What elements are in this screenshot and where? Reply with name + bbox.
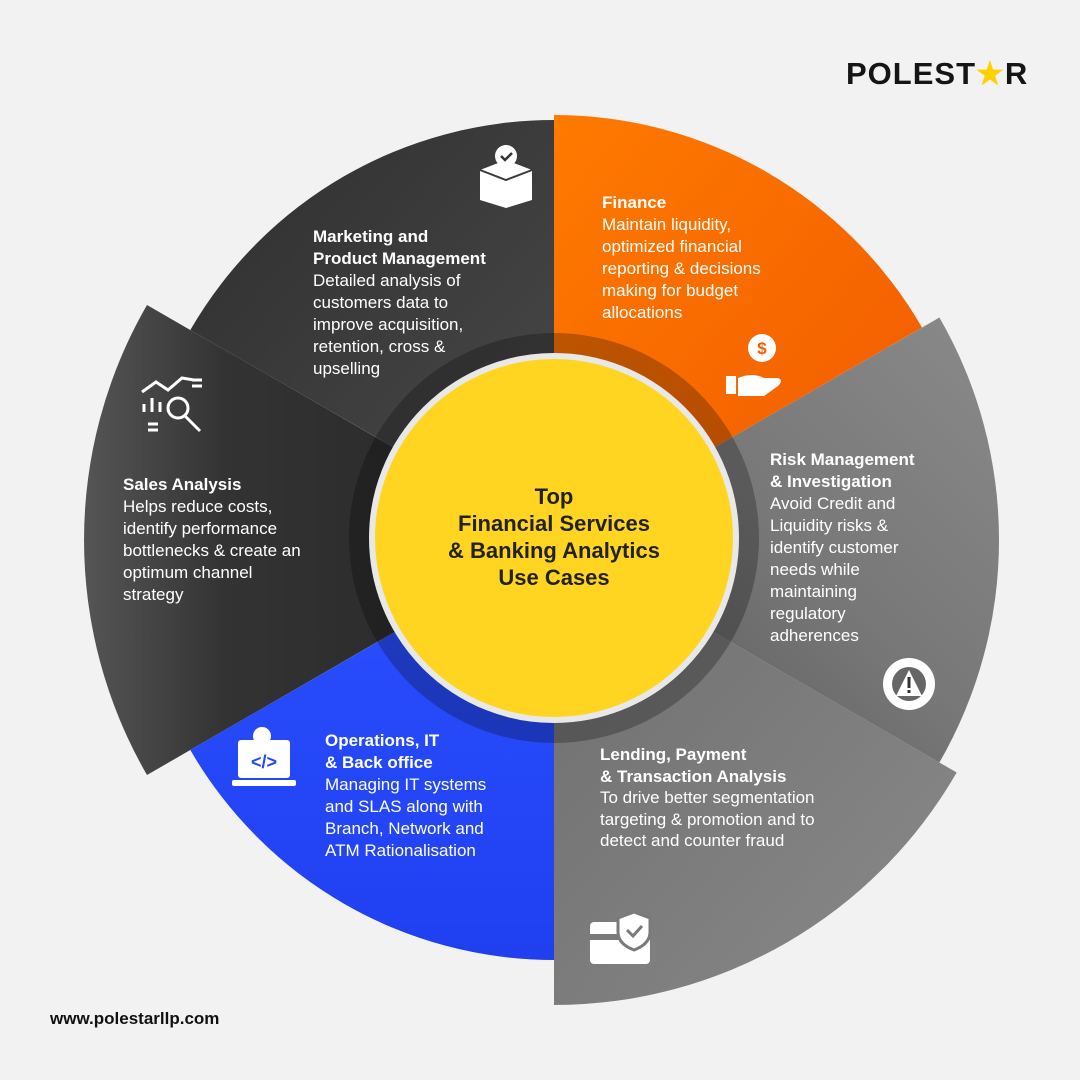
text: marketing: improve acquisition, <box>313 315 463 334</box>
icon: box <box>480 145 532 208</box>
segment: operations <box>190 540 554 960</box>
text: operations: and SLAS along with <box>325 797 483 816</box>
text: risk: Avoid Credit and <box>770 494 895 513</box>
text: marketing: retention, cross & <box>313 337 445 356</box>
text: finance: Maintain liquidity, <box>602 215 731 234</box>
text: risk: maintaining <box>770 582 857 601</box>
text: risk: Risk Management <box>770 450 915 469</box>
icon: money hand: $ <box>757 339 767 358</box>
text: sales: identify performance <box>123 519 277 538</box>
segment: sales <box>84 305 554 775</box>
text: operations: Managing IT systems <box>325 775 486 794</box>
text: operations: Operations, IT <box>325 731 439 750</box>
segment: risk <box>554 318 999 762</box>
text: lending: Lending, Payment <box>600 745 746 764</box>
text: sales <box>123 475 301 604</box>
text: finance: reporting & decisions <box>602 259 761 278</box>
icon: laptop code <box>232 727 296 786</box>
text: operations: ATM Rationalisation <box>325 841 476 860</box>
text: marketing: upselling <box>313 359 380 378</box>
icon: gear warning <box>883 658 935 710</box>
text: sales: optimum channel <box>123 563 252 582</box>
segment: lending <box>554 540 957 1005</box>
text: operations <box>325 731 486 860</box>
text: marketing: Detailed analysis of <box>313 271 460 290</box>
text: lending <box>600 745 815 850</box>
center title: Top <box>535 484 573 509</box>
text: marketing <box>313 227 486 378</box>
center title: Financial Services <box>458 511 650 536</box>
icon: chart magnifier <box>142 378 202 431</box>
text: finance: Finance <box>602 193 666 212</box>
logo: POLEST★R <box>846 56 1028 91</box>
text: risk: regulatory <box>770 604 846 623</box>
text: risk: & Investigation <box>770 472 892 491</box>
text: finance: optimized financial <box>602 237 742 256</box>
text: sales: Sales Analysis <box>123 475 241 494</box>
text: finance <box>602 193 761 322</box>
center title: Use Cases <box>498 565 610 590</box>
center title: & Banking Analytics <box>448 538 660 563</box>
text: risk: identify customer <box>770 538 898 557</box>
text: operations: & Back office <box>325 753 433 772</box>
icon: card shield <box>590 912 650 964</box>
icon: money hand <box>726 334 781 396</box>
text: marketing: customers data to <box>313 293 448 312</box>
text: operations: Branch, Network and <box>325 819 484 838</box>
text: finance: allocations <box>602 303 682 322</box>
inner dark ring <box>349 333 759 743</box>
segment: marketing <box>190 120 554 540</box>
text: risk: adherences <box>770 626 859 645</box>
text: sales: Helps reduce costs, <box>123 497 272 516</box>
text: risk <box>770 450 915 645</box>
icon: laptop code: </> <box>251 752 277 772</box>
text: lending: detect and counter fraud <box>600 831 784 850</box>
text: lending: To drive better segmentation <box>600 788 815 807</box>
text: sales: bottlenecks & create an <box>123 541 301 560</box>
center title <box>448 484 660 590</box>
text: risk: Liquidity risks & <box>770 516 888 535</box>
center circle <box>372 356 736 720</box>
text: marketing: Marketing and <box>313 227 428 246</box>
text: sales: strategy <box>123 585 183 604</box>
segment: finance <box>554 115 922 540</box>
website: www.polestarllp.com <box>50 1009 219 1028</box>
text: lending: targeting & promotion and to <box>600 810 815 828</box>
text: risk: needs while <box>770 560 860 579</box>
text: marketing: Product Management <box>313 249 486 268</box>
text: finance: making for budget <box>602 281 738 300</box>
text: lending: & Transaction Analysis <box>600 766 786 786</box>
